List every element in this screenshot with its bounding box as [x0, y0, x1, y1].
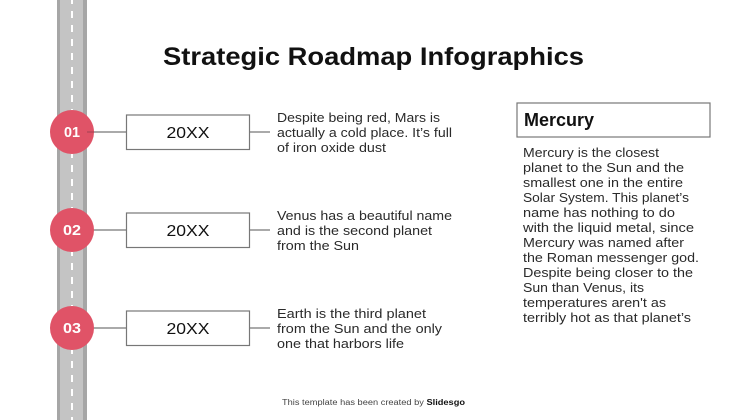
roadmap item 03: from the Sun and the only — [277, 321, 443, 336]
text block: Mercury description: name has nothing to do — [523, 205, 675, 220]
panel: Mercury heading — [517, 103, 710, 137]
text block: Mercury description: Mercury was named after — [523, 235, 685, 250]
roadmap item 02: from the Sun — [277, 238, 359, 253]
roadmap item 02: 02 — [63, 223, 81, 239]
roadmap item 01: 20XX — [166, 125, 210, 142]
text block: Mercury description: temperatures aren't as — [523, 295, 667, 310]
roadmap item 03: 20XX — [166, 321, 210, 338]
road — [57, 0, 87, 420]
text block: Mercury description: Despite being closer to the — [523, 265, 693, 280]
footer credit: This template has been created by Slidesgo — [282, 398, 465, 407]
roadmap item 02 — [50, 208, 452, 253]
text block: Mercury description — [522, 145, 699, 325]
roadmap item 03: one that harbors life — [277, 336, 404, 351]
title: Strategic Roadmap Infographics — [163, 43, 584, 71]
text block: Mercury description: Solar System. This planet’s — [523, 190, 690, 205]
text block: Mercury description: terribly hot as that planet’s — [523, 310, 692, 325]
roadmap item 03: Earth is the third planet — [277, 306, 426, 321]
text block: Mercury description: smallest one in the entire — [523, 175, 683, 190]
panel: Mercury heading: Mercury — [524, 110, 594, 130]
roadmap item 01: actually a cold place. It’s full — [277, 125, 452, 140]
roadmap item 01: of iron oxide dust — [277, 140, 386, 155]
text block: Mercury description: the Roman messenger god. — [523, 250, 699, 265]
text block: Mercury description: with the liquid metal, since — [522, 220, 694, 235]
roadmap item 02: and is the second planet — [277, 223, 432, 238]
text block: Mercury description: planet to the Sun and the — [523, 160, 684, 175]
text block: Mercury description: Mercury is the closest — [523, 145, 659, 160]
roadmap item 01 — [50, 110, 452, 155]
roadmap item 01: Despite being red, Mars is — [277, 110, 441, 125]
roadmap item 02: 20XX — [166, 223, 210, 240]
roadmap item 01: 01 — [64, 125, 80, 141]
roadmap item 03: 03 — [63, 321, 81, 337]
roadmap item 02: Venus has a beautiful name — [277, 208, 452, 223]
roadmap item 03 — [50, 306, 443, 351]
text block: Mercury description: Sun than Venus, its — [523, 280, 645, 295]
